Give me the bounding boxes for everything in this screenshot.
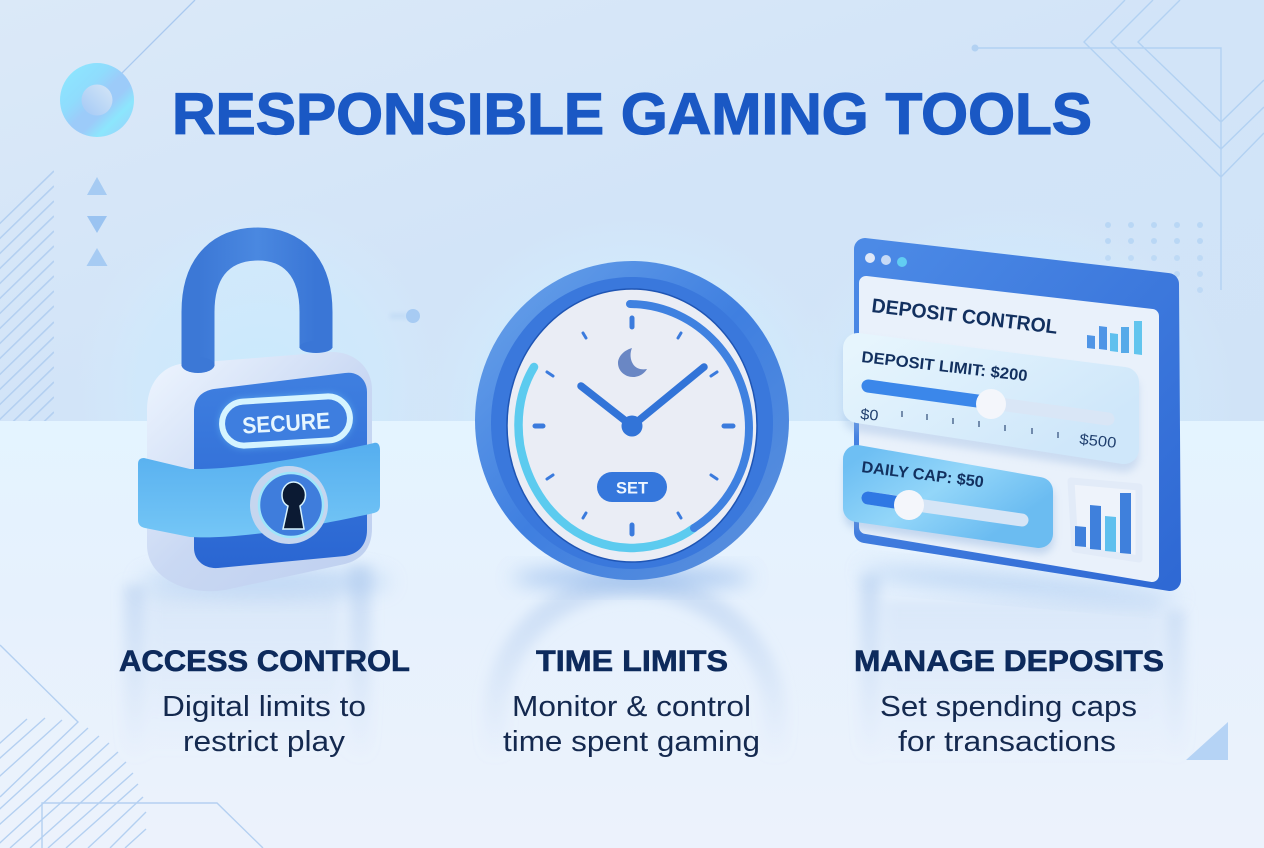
padlock blue panel [194, 373, 367, 568]
icon: deposit control dashboard [857, 249, 1180, 609]
window content area [866, 283, 1152, 575]
icon: clock [475, 261, 789, 588]
padlock shackle [182, 244, 332, 373]
clock hub [622, 416, 642, 436]
description [162, 691, 366, 758]
description: Digital limits to [162, 691, 366, 723]
moon icon [618, 348, 647, 377]
decorative dot with tail [390, 309, 420, 323]
deposit limit panel [858, 348, 1124, 457]
description: restrict play [183, 726, 346, 758]
dashboard heading: DEPOSIT CONTROL [870, 295, 1059, 339]
decorative circuit lines: top right [972, 0, 1264, 290]
clock ticks [535, 318, 733, 534]
secure badge: SECURE [241, 407, 331, 439]
column: access control [119, 645, 410, 758]
icon: padlock [138, 244, 390, 596]
small chart card [1071, 481, 1139, 559]
decorative hatching: left [0, 170, 54, 421]
description [503, 691, 760, 758]
mini bar chart [1087, 321, 1142, 355]
clock outer rim [475, 261, 789, 580]
decorative dot grid [1105, 222, 1203, 293]
padlock body [147, 352, 372, 591]
column: time limits [503, 645, 760, 758]
column: manage deposits [854, 645, 1164, 758]
deposit limit scale [860, 406, 1117, 452]
description: Monitor & control [512, 691, 751, 723]
description: time spent gaming [503, 726, 760, 758]
description: Set spending caps [880, 691, 1137, 723]
deposit limit slider [868, 386, 1108, 419]
description: for transactions [898, 726, 1116, 758]
window dots [865, 253, 907, 267]
clock hands [581, 367, 704, 426]
title: RESPONSIBLE GAMING TOOLS [172, 82, 1092, 147]
daily cap panel [857, 459, 1040, 540]
heading: TIME LIMITS [536, 645, 728, 678]
clock progress arcs [518, 304, 749, 548]
heading: MANAGE DEPOSITS [854, 645, 1164, 678]
decorative triangle: bottom right [1186, 722, 1228, 760]
daily cap slider [868, 490, 1022, 520]
deposit limit label: DEPOSIT LIMIT: $200 [861, 349, 1028, 385]
window frame [865, 249, 1170, 580]
deposit limit scale: $500 [1079, 431, 1117, 452]
daily cap label: DAILY CAP: $50 [860, 459, 985, 491]
clock face [507, 289, 757, 562]
set button [597, 472, 667, 502]
heading: ACCESS CONTROL [119, 645, 410, 678]
set button: SET [616, 478, 649, 498]
decorative lines and hatching: bottom left [0, 645, 263, 848]
description [880, 691, 1137, 758]
decorative triangles [86, 177, 108, 266]
secure badge [219, 393, 353, 449]
keyhole [250, 466, 328, 544]
decorative line and ring: top left [60, 0, 195, 137]
deposit limit scale: $0 [860, 406, 879, 425]
padlock band [138, 443, 380, 537]
